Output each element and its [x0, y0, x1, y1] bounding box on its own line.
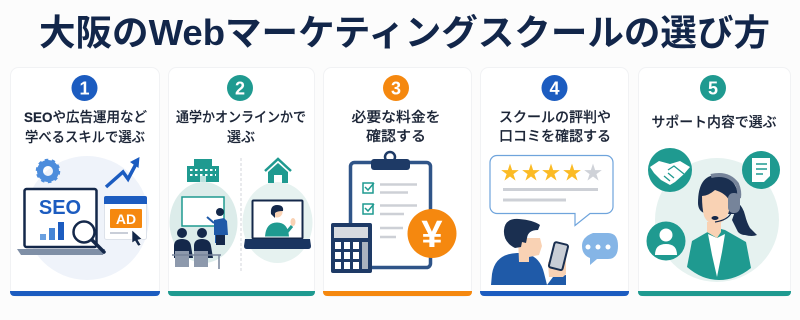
heading 1: SEOや広告運用など: [24, 109, 147, 125]
star rating: ★: [562, 163, 582, 184]
icon: school building: [187, 159, 219, 182]
heading 5: サポート内容で選ぶ: [652, 114, 776, 130]
number badge 2: [227, 75, 253, 101]
heading 2: 選ぶ: [227, 129, 255, 145]
review text lines: [503, 190, 598, 200]
jacket: [687, 228, 751, 280]
illustration: classroom versus online: [170, 158, 312, 273]
ponytail: [732, 203, 757, 236]
number badge 1: 1: [79, 78, 90, 98]
icon: growth arrow: [106, 157, 140, 187]
icon: magnifier: [74, 222, 104, 252]
card background: [168, 68, 315, 296]
review speech bubble: [490, 156, 613, 226]
illustration: clipboard, calculator, yen: [331, 152, 456, 273]
icon: yen coin: ¥: [421, 214, 443, 256]
icon: house: [265, 159, 291, 183]
title: 大阪のWebマーケティングスクールの選び方: [39, 12, 770, 53]
number badge 1: [72, 75, 98, 101]
students at desk: [172, 228, 221, 269]
heading 3: 必要な料金を: [352, 109, 440, 125]
heading 3: [352, 109, 440, 144]
illustration: review and smartphone: [490, 156, 618, 285]
heading 2: [176, 109, 306, 145]
illustration: support operator: [646, 148, 780, 282]
number badge 5: [700, 75, 726, 101]
clipboard: [350, 152, 430, 268]
face: [702, 190, 730, 224]
number badge 5: 5: [708, 78, 718, 98]
checklist: [363, 183, 417, 237]
heading 1: 学べるスキルで選ぶ: [25, 129, 145, 145]
number badge 4: 4: [549, 78, 560, 98]
person with phone: [491, 219, 568, 285]
number badge 3: [383, 75, 409, 101]
operator woman: [687, 175, 757, 280]
icon: chat bubble: [582, 233, 618, 265]
heading 1: [24, 109, 147, 145]
icon: handshake: [648, 148, 692, 192]
whiteboard: [182, 197, 224, 226]
number badge 3: 3: [391, 78, 401, 98]
calculator: [331, 223, 372, 273]
heading 4: 口コミを確認する: [499, 128, 611, 144]
card background: [323, 68, 472, 296]
heading 2: 通学かオンラインかで: [176, 109, 306, 125]
card background: [10, 68, 160, 296]
panel: step 1 SEO and ad skills: [10, 68, 160, 296]
icon: gear: [37, 160, 59, 182]
panel: step 5 support: [638, 68, 791, 296]
star rating: ★: [521, 163, 541, 184]
laptop with online instructor: [244, 200, 311, 249]
heading 4: スクールの評判や: [499, 109, 611, 125]
star rating: ★: [500, 163, 520, 184]
number badge 4: [542, 75, 568, 101]
teacher: [207, 208, 228, 245]
number badge 2: 2: [235, 78, 245, 98]
hair back: [698, 175, 739, 214]
card background: [480, 68, 629, 296]
panel: step 4 reviews: [480, 68, 629, 296]
star rating: ★: [541, 163, 561, 184]
icon: cursor: [132, 230, 142, 246]
card background: [638, 68, 791, 296]
star rating: [500, 163, 603, 184]
laptop with SEO text: SEO: [39, 197, 81, 219]
icon: document: [742, 151, 780, 189]
icon: user: [646, 222, 686, 260]
panel: step 2 in-person or online: [168, 68, 315, 296]
illustration: SEO laptop and ad: [17, 156, 149, 280]
heading 3: 確認する: [366, 128, 426, 144]
heading 4: [499, 109, 611, 144]
ad window: AD: [116, 211, 136, 227]
panel: step 3 check fees: [323, 68, 472, 296]
headset: [711, 175, 740, 222]
star rating: ★: [583, 163, 603, 184]
